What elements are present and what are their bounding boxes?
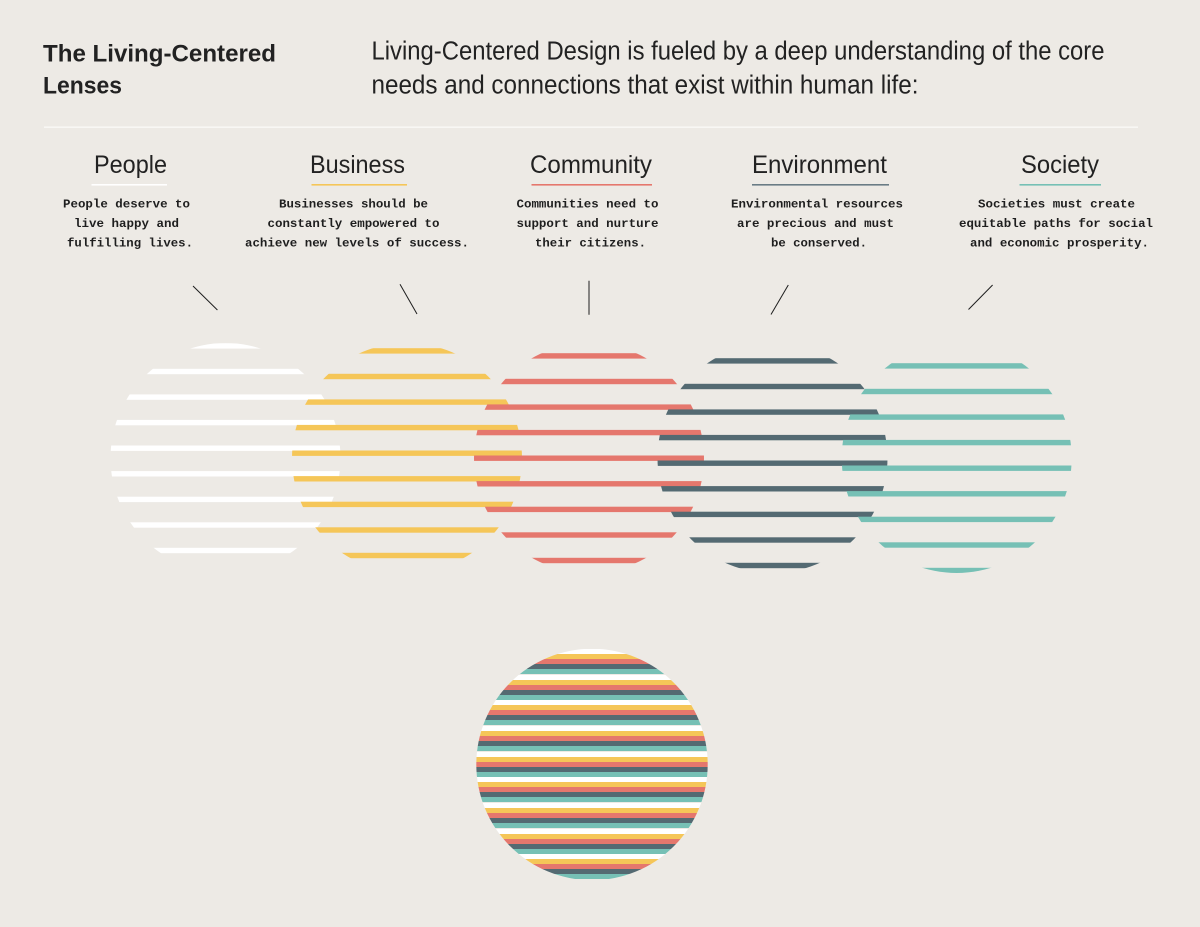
description: environment [731,198,903,250]
connector line: people [193,286,217,310]
description: environment: are precious and must [737,217,894,231]
description: business: Businesses should be [279,198,428,212]
title: Lenses [43,73,122,100]
panel: environment [731,151,903,250]
panel: people [63,151,193,250]
description: society: and economic prosperity. [970,236,1149,250]
heading: society: Society [1021,151,1099,179]
description: society: equitable paths for social [959,217,1153,231]
heading: environment: Environment [752,151,887,179]
connector line: society [968,285,993,310]
underline: community [532,184,652,186]
lens: society [842,363,1072,573]
underline: society [1020,184,1101,186]
description: society [959,198,1153,250]
description: community [516,198,658,250]
heading: community: Community [530,151,652,179]
intro text: needs and connections that exist within human life: [372,72,918,100]
description: people: fulfilling lives. [67,236,193,250]
lens: community [474,353,704,564]
description: business: achieve new levels of success. [245,236,469,250]
description: community: their citizens. [535,236,646,250]
description: business [245,198,469,250]
intro text [372,38,1104,100]
heading: people: People [94,151,167,179]
panel: society [959,151,1153,250]
lens: people [110,343,340,554]
description: business: constantly empowered to [268,217,440,231]
description: community: support and nurture [516,217,658,231]
combined lens [476,649,708,879]
description: society: Societies must create [978,198,1135,212]
heading: business: Business [310,151,405,179]
panel: community [516,151,658,250]
underline: people [92,184,167,186]
lens: environment [658,358,888,568]
intro text: Living-Centered Design is fueled by a deep understanding of the core [372,38,1104,66]
connector line: environment [771,285,788,314]
underline: business [312,184,407,186]
title: The Living-Centered [43,41,276,68]
underline: environment [752,184,889,186]
description: community: Communities need to [516,198,658,212]
connector line: business [400,284,417,314]
title [43,41,276,100]
description: environment: Environmental resources [731,198,903,212]
connector line: community [588,281,590,315]
description: people: live happy and [74,217,179,231]
description: environment: be conserved. [771,236,867,250]
description: people [63,198,193,250]
lens: business [292,348,522,558]
panel: business [245,151,469,250]
description: people: People deserve to [63,198,190,212]
